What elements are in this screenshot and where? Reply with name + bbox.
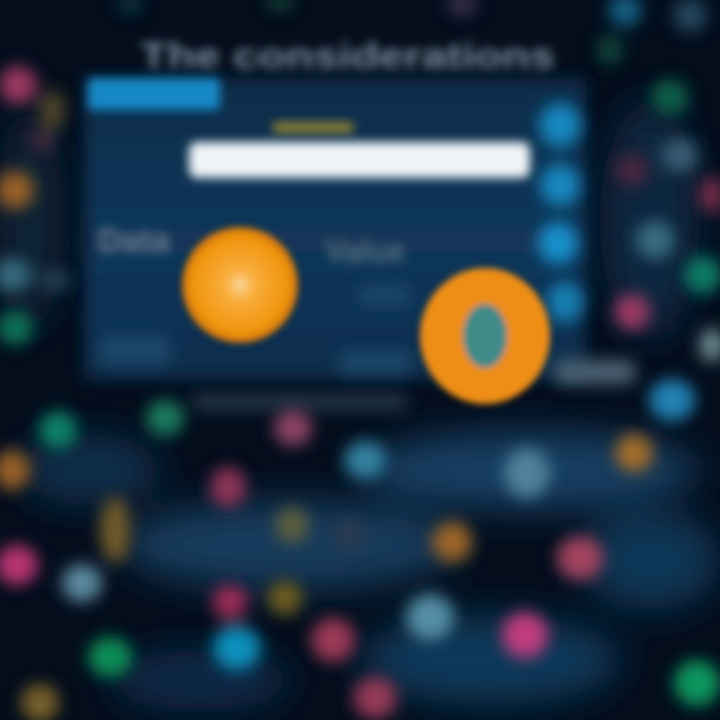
text: faint lines xyxy=(100,285,410,374)
ring body xyxy=(420,268,550,404)
ring centre xyxy=(463,304,507,368)
panel background xyxy=(84,78,586,380)
icon: orange ring B xyxy=(420,268,550,404)
text: right label: Value xyxy=(325,233,405,269)
strip: dark caption under panel xyxy=(192,394,408,410)
tab: blue header xyxy=(88,78,220,110)
icons: right blue dots xyxy=(538,103,583,322)
bar: white search bar xyxy=(189,142,530,178)
text: left label: Data xyxy=(98,222,171,260)
label: gold caption xyxy=(272,122,354,133)
heading: title: The considerations xyxy=(140,35,555,76)
panel: central window xyxy=(84,35,635,410)
icon: orange circle A xyxy=(182,227,298,343)
label: grey tag xyxy=(555,360,635,384)
